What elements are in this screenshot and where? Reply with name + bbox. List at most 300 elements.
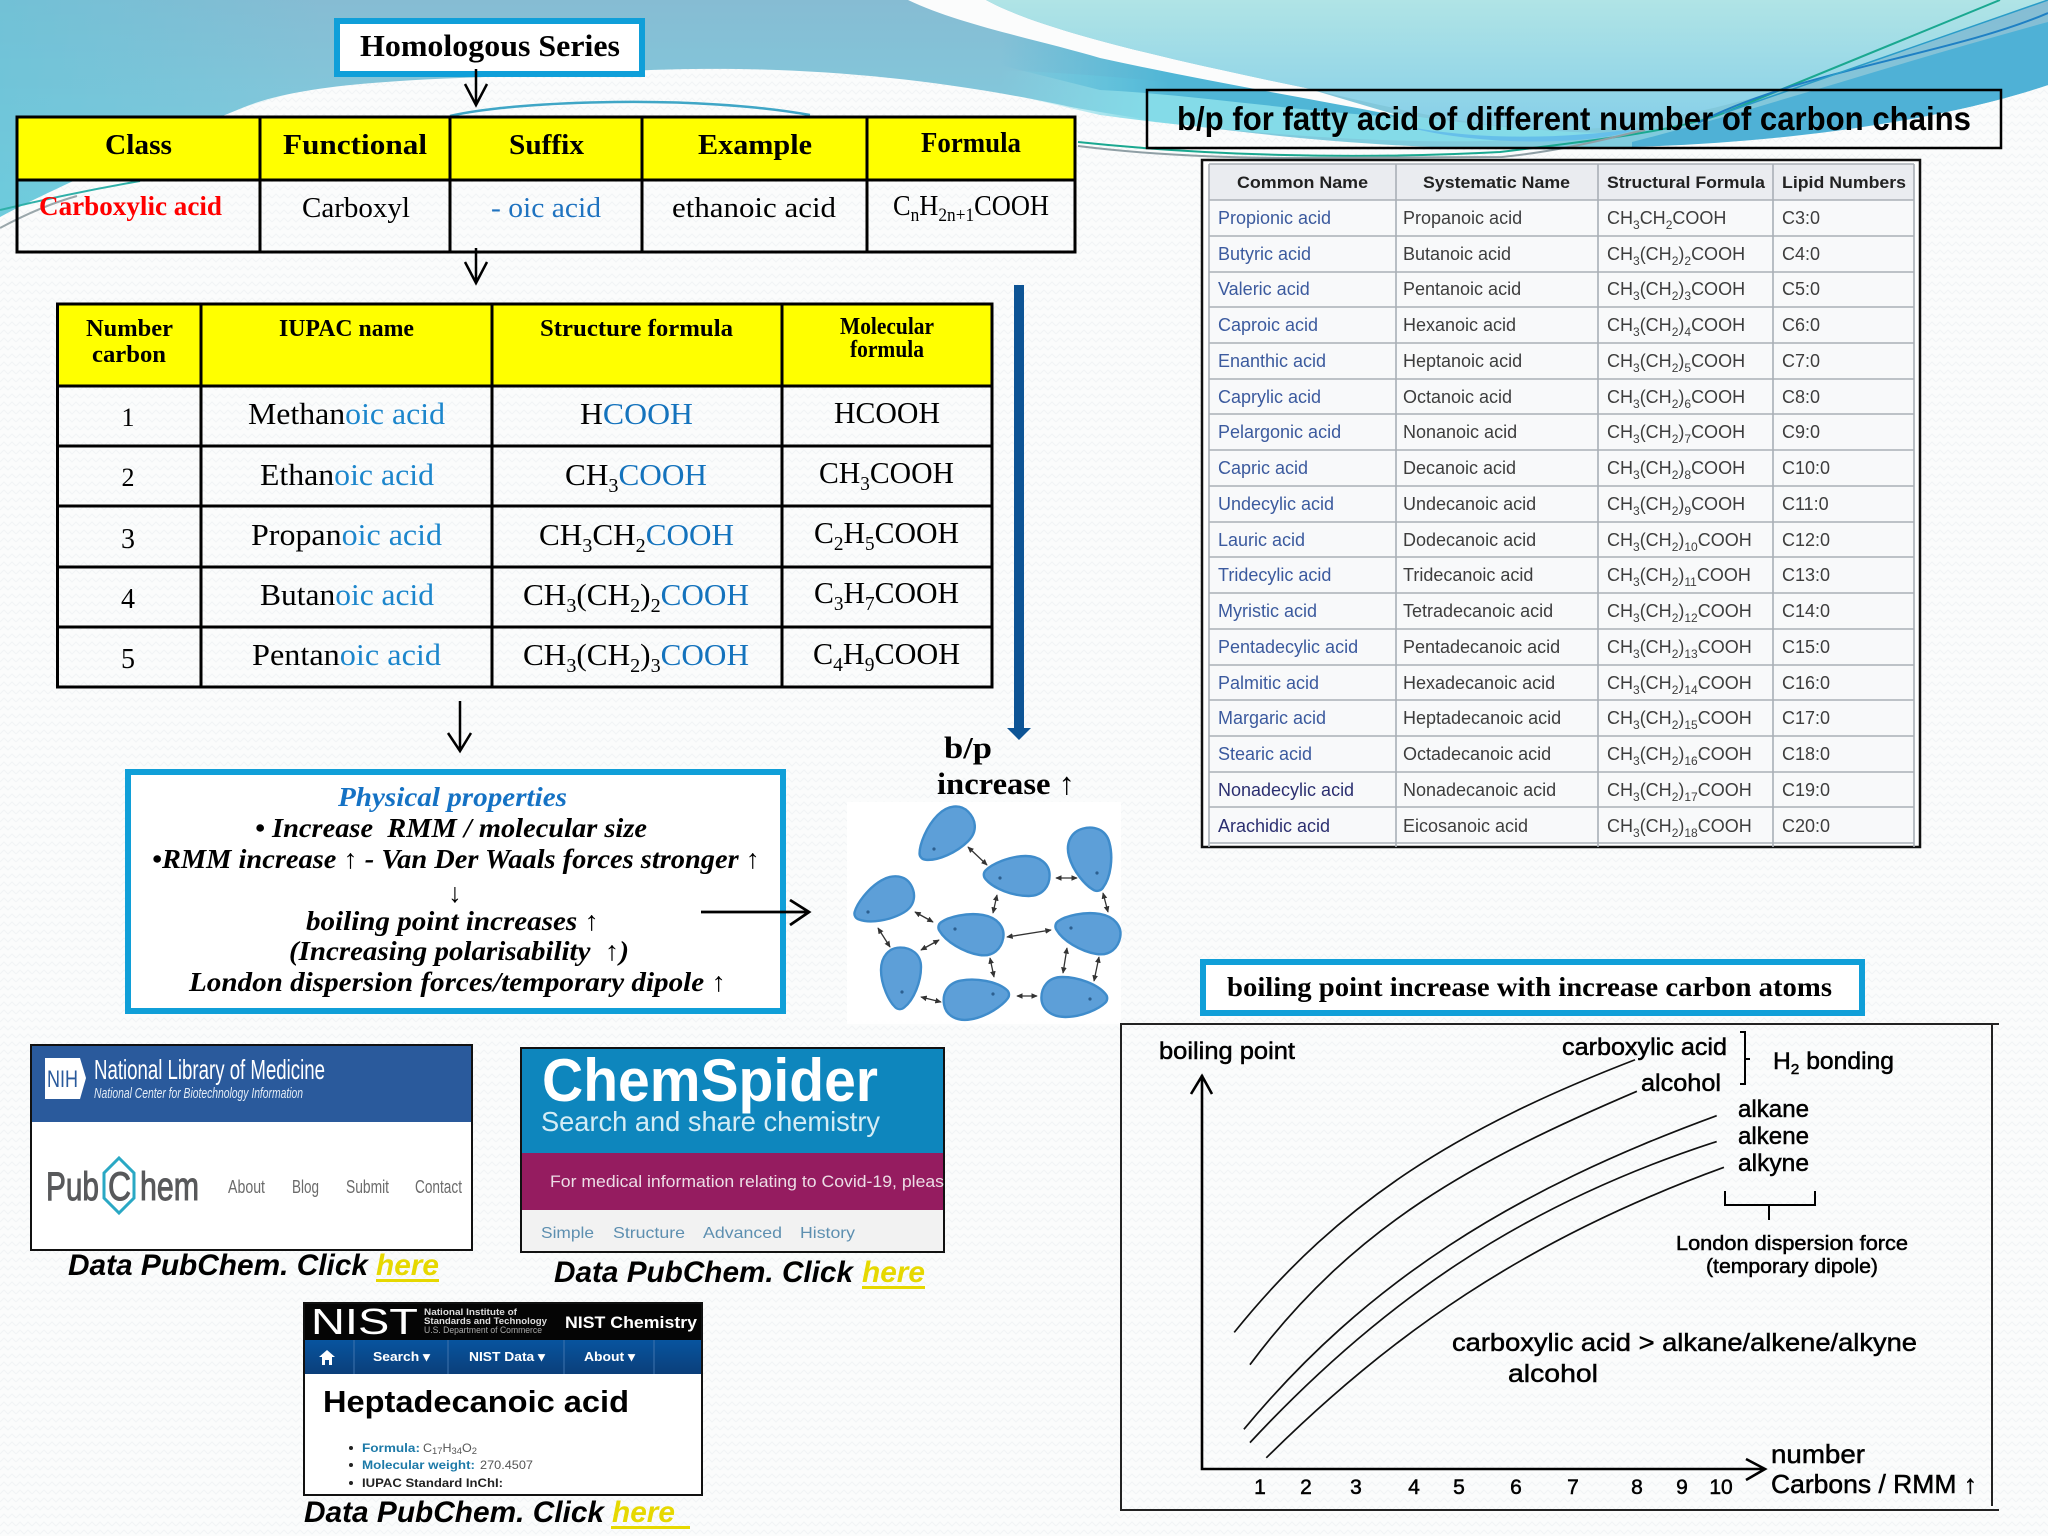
- table rows: fatty acids: ): [1678, 780, 1684, 800]
- screenshot: PubChem: hem: [140, 1165, 199, 1209]
- text block: properties list: boiling point increases ↑: [306, 906, 599, 936]
- table rows: fatty acids: 3: [1633, 540, 1640, 554]
- screenshot: PubChem: Blog: [292, 1177, 319, 1197]
- table row: pentanoic acid: 9: [865, 654, 874, 676]
- table rows: fatty acids: ): [1678, 458, 1684, 478]
- table rows: fatty acids: ): [1678, 708, 1684, 728]
- table row: butanoic acid: 7: [865, 593, 875, 615]
- text block: properties list: London dispersion forces/temporary dipole ↑: [188, 967, 726, 997]
- table rows: fatty acids: ): [1678, 673, 1684, 693]
- table rows: fatty acids: 2: [1672, 468, 1679, 482]
- screenshot: ChemSpider: For medical information relating to Covid-19, pleas: [550, 1172, 944, 1191]
- heading box: boiling point trend: [1203, 962, 1862, 1013]
- table row: methanoic acid: Methanoic acid: [248, 396, 446, 431]
- table rows: fatty acids: (CH: [1640, 315, 1672, 335]
- comparison text: alcohol: [1508, 1360, 1598, 1388]
- table rows: fatty acids: ): [1678, 315, 1684, 335]
- table rows: fatty acids: Tetradecanoic acid: [1403, 601, 1553, 621]
- table row: ethanoic acid: [122, 455, 954, 497]
- table rows: fatty acids: Nonanoic acid: [1403, 422, 1517, 442]
- table rows: fatty acids: CH: [1607, 816, 1633, 836]
- table rows: fatty acids: Propionic acid: [1218, 208, 1331, 228]
- table rows: fatty acids: C12:0: [1782, 530, 1830, 550]
- table rows: fatty acids: CH: [1607, 279, 1633, 299]
- table rows: fatty acids: (CH: [1640, 279, 1672, 299]
- screenshot: NIST: NIST Data ▾: [469, 1349, 545, 1364]
- table rows: fatty acids: (CH: [1640, 458, 1672, 478]
- table: homologous series members: [57, 304, 992, 687]
- screenshot: NIST: About ▾: [584, 1349, 635, 1364]
- table row: methanoic acid: HCOOH: [580, 396, 693, 431]
- screenshot: NIST: National Institute of: [424, 1307, 518, 1318]
- table rows: fatty acids: COOH: [1691, 244, 1745, 264]
- table rows: fatty acids: 6: [1684, 397, 1691, 411]
- table rows: fatty acids: Capric acid: [1218, 458, 1308, 478]
- table rows: fatty acids: COOH: [1698, 637, 1752, 657]
- table row: butanoic acid: C: [814, 575, 835, 610]
- table rows: fatty acids: CH: [1607, 530, 1633, 550]
- table rows: fatty acids: COOH: [1691, 351, 1745, 371]
- table rows: fatty acids: 3: [1633, 683, 1640, 697]
- table rows: fatty acids: COOH: [1691, 422, 1745, 442]
- table rows: fatty acids: Nonadecylic acid: [1218, 780, 1354, 800]
- table row: pentanoic acid: COOH: [874, 636, 960, 671]
- table row: carboxylic acid: [39, 190, 1049, 226]
- table rows: fatty acids: (CH: [1640, 780, 1672, 800]
- heading: physical properties: Physical properties: [337, 782, 567, 812]
- table row: carboxylic acid: Carboxylic acid: [39, 191, 222, 221]
- table rows: fatty acids: CH: [1607, 673, 1633, 693]
- table rows: fatty acids: 7: [1684, 432, 1691, 446]
- screenshot: ChemSpider: Structure: [613, 1225, 685, 1242]
- table rows: fatty acids: Nonadecanoic acid: [1403, 780, 1556, 800]
- table rows: fatty acids: 3: [1633, 611, 1640, 625]
- callout: hydrogen bonding: bonding: [1799, 1048, 1894, 1075]
- table header: class summary: Formula: [921, 127, 1021, 159]
- screenshot: PubChem: National Center for Biotechnology Information: [94, 1085, 303, 1102]
- comparison text: carboxylic acid > alkane/alkene/alkyne: [1452, 1329, 1917, 1357]
- x axis tick labels: 2: [1300, 1476, 1312, 1499]
- table row: ethanoic acid: 2: [122, 463, 134, 492]
- table row: carboxylic acid: 2n+1: [938, 205, 974, 226]
- table rows: fatty acids: C7:0: [1782, 351, 1820, 371]
- table rows: fatty acids: C15:0: [1782, 637, 1830, 657]
- table rows: fatty acids: 2: [1666, 218, 1673, 232]
- table rows: fatty acids: COOH: [1698, 780, 1752, 800]
- table row: propanoic acid: 3: [121, 524, 135, 555]
- table rows: fatty acids: C8:0: [1782, 387, 1820, 407]
- x axis label: Carbons / RMM ↑: [1771, 1469, 1977, 1499]
- x axis tick labels: 3: [1350, 1476, 1362, 1499]
- table rows: fatty acids: 3: [1633, 718, 1640, 732]
- table rows: fatty acids: CH: [1607, 601, 1633, 621]
- table rows: fatty acids: 2: [1672, 432, 1679, 446]
- table row: carboxylic acid: ethanoic acid: [672, 192, 837, 224]
- table rows: fatty acids: ): [1678, 422, 1684, 442]
- callout: London dispersion force: London dispersion force: [1676, 1233, 1908, 1255]
- table rows: fatty acids: C6:0: [1782, 315, 1820, 335]
- table rows: fatty acids: Arachidic acid: [1218, 816, 1330, 836]
- screenshot: NIST: 2: [472, 1446, 477, 1456]
- table rows: fatty acids: COOH: [1691, 494, 1745, 514]
- table rows: fatty acids: CH: [1607, 744, 1633, 764]
- table rows: fatty acids: COOH: [1698, 601, 1752, 621]
- table rows: fatty acids: COOH: [1698, 816, 1752, 836]
- table row: propanoic acid: C: [814, 515, 835, 550]
- table rows: fatty acids: 18: [1684, 826, 1698, 840]
- table rows: fatty acids: Caprylic acid: [1218, 387, 1321, 407]
- table row: propanoic acid: 5: [865, 533, 875, 555]
- x axis tick labels: 6: [1510, 1476, 1522, 1499]
- table row: carboxylic acid: H: [919, 190, 938, 222]
- arrow: series table to physical properties: [448, 701, 471, 751]
- x axis tick labels: [1254, 1476, 1733, 1499]
- table rows: fatty acids: (CH: [1640, 816, 1672, 836]
- table row: butanoic acid: CH: [523, 577, 566, 612]
- table rows: fatty acids: CH: [1607, 315, 1633, 335]
- table rows: fatty acids: Pentadecanoic acid: [1403, 637, 1560, 657]
- table row: methanoic acid: [122, 395, 940, 432]
- arrow: class table to series table: [465, 248, 487, 283]
- table rows: fatty acids: 2: [1672, 504, 1679, 518]
- heading box: boiling point trend: boiling point increase with increase carbon atoms: [1227, 972, 1832, 1002]
- table rows: fatty acids: COOH: [1698, 744, 1752, 764]
- table rows: fatty acids: C13:0: [1782, 565, 1830, 585]
- table rows: fatty acids: Enanthic acid: [1218, 351, 1326, 371]
- table rows: fatty acids: 3: [1633, 647, 1640, 661]
- table rows: fatty acids: C5:0: [1782, 279, 1820, 299]
- x axis tick labels: 7: [1567, 1476, 1579, 1499]
- table rows: fatty acids: ): [1678, 816, 1684, 836]
- table row: propanoic acid: CH: [592, 517, 636, 552]
- table rows: fatty acids: 2: [1672, 540, 1679, 554]
- table row: methanoic acid: HCOOH: [834, 395, 940, 430]
- table row: methanoic acid: 1: [122, 403, 134, 432]
- table header: series members: Number: [86, 316, 173, 342]
- table rows: fatty acids: ): [1678, 744, 1684, 764]
- table rows: fatty acids: 14: [1684, 683, 1698, 697]
- table row: carboxylic acid: - oic acid: [491, 192, 602, 224]
- screenshot: PubChem: Contact: [415, 1177, 462, 1197]
- table row: pentanoic acid: CH: [523, 637, 566, 672]
- screenshot: NIST: C: [423, 1441, 432, 1455]
- table rows: fatty acids: CH: [1607, 637, 1633, 657]
- callout: London dispersion force: (temporary dipole): [1706, 1256, 1878, 1278]
- table rows: fatty acids: (CH: [1640, 494, 1672, 514]
- screenshot: NIST: H: [443, 1441, 452, 1455]
- table rows: fatty acids: COOH: [1698, 708, 1752, 728]
- table rows: fatty acids: 3: [1633, 289, 1640, 303]
- table row: propanoic acid: Propanoic acid: [251, 517, 443, 552]
- table rows: fatty acids: COOH: [1697, 565, 1751, 585]
- table rows: fatty acids: ): [1678, 244, 1684, 264]
- table rows: fatty acids: CH: [1607, 351, 1633, 371]
- table row: pentanoic acid: COOH: [661, 637, 749, 672]
- panel: physical properties: [128, 772, 783, 1011]
- table rows: fatty acids: Palmitic acid: [1218, 673, 1319, 693]
- caption: NIST link: here: [612, 1496, 675, 1529]
- table rows: fatty acids: ): [1678, 601, 1684, 621]
- table rows: fatty acids: Tridecanoic acid: [1403, 565, 1533, 585]
- caption: PubChem link: here: [376, 1249, 439, 1282]
- screenshot: ChemSpider: Simple: [541, 1225, 594, 1242]
- screenshot: NIST: 270.4507: [480, 1458, 533, 1472]
- table header: class summary: [105, 127, 1021, 161]
- table rows: fatty acids: Hexanoic acid: [1403, 315, 1516, 335]
- table rows: fatty acids: (CH: [1640, 601, 1672, 621]
- table rows: fatty acids: CH: [1607, 708, 1633, 728]
- table rows: fatty acids: 16: [1684, 754, 1698, 768]
- table rows: fatty acids: 2: [1672, 361, 1679, 375]
- table row: butanoic acid: 3: [834, 593, 843, 615]
- table rows: fatty acids: CH: [1607, 565, 1633, 585]
- table rows: fatty acids: 3: [1633, 325, 1640, 339]
- table rows: fatty acids: CH: [1607, 244, 1633, 264]
- table rows: fatty acids: 2: [1672, 611, 1679, 625]
- table row: pentanoic acid: Pentanoic acid: [252, 637, 442, 672]
- text block: properties list: [152, 813, 760, 997]
- x axis tick labels: 8: [1631, 1476, 1643, 1499]
- table rows: fatty acids: 3: [1633, 754, 1640, 768]
- screenshot: PubChem: [31, 1045, 472, 1250]
- table rows: fatty acids: 2: [1672, 325, 1679, 339]
- table rows: fatty acids: 17: [1684, 790, 1698, 804]
- table rows: fatty acids: C17:0: [1782, 708, 1830, 728]
- table rows: fatty acids: (CH: [1640, 422, 1672, 442]
- caption: ChemSpider link: here: [862, 1256, 925, 1289]
- text block: properties list: •RMM increase ↑ - Van Der Waals forces stronger ↑: [152, 844, 760, 874]
- table rows: fatty acids: C14:0: [1782, 601, 1830, 621]
- screenshot: PubChem: Submit: [346, 1177, 389, 1197]
- table rows: fatty acids: COOH: [1691, 315, 1745, 335]
- table rows: fatty acids: Undecanoic acid: [1403, 494, 1536, 514]
- table header: fatty acids: Structural Formula: [1607, 173, 1766, 192]
- table rows: fatty acids: 8: [1684, 468, 1691, 482]
- table rows: fatty acids: Lauric acid: [1218, 530, 1305, 550]
- chart curves: [1234, 1060, 1724, 1458]
- table row: pentanoic acid: (CH: [576, 637, 630, 672]
- table rows: fatty acids: 9: [1684, 504, 1691, 518]
- table rows: fatty acids: 2: [1672, 647, 1679, 661]
- table rows: fatty acids: Pelargonic acid: [1218, 422, 1341, 442]
- table rows: fatty acids: Propanoic acid: [1403, 208, 1522, 228]
- table rows: fatty acids: Pentanoic acid: [1403, 279, 1521, 299]
- table rows: fatty acids: CH: [1607, 458, 1633, 478]
- table rows: fatty acids: COOH: [1672, 208, 1726, 228]
- arrow: blue trend down: [1007, 285, 1031, 740]
- screenshot: NIST: Heptadecanoic acid: [323, 1384, 629, 1419]
- table rows: fatty acids: 2: [1672, 754, 1679, 768]
- table row: pentanoic acid: 3: [651, 655, 661, 677]
- table rows: fatty acids: Octanoic acid: [1403, 387, 1512, 407]
- heading box: fatty acid boiling points: b/p for fatty acid of different number of carbon chains: [1177, 100, 1971, 137]
- table row: propanoic acid: 2: [834, 533, 843, 555]
- table rows: fatty acids: 3: [1633, 218, 1640, 232]
- line chart: boiling point vs carbon number: [1121, 1024, 1999, 1510]
- screenshot: NIST: Formula:: [362, 1441, 420, 1455]
- table rows: fatty acids: Tridecylic acid: [1218, 565, 1331, 585]
- table rows: fatty acids: C18:0: [1782, 744, 1830, 764]
- callout: hydrogen bonding: H: [1773, 1048, 1790, 1075]
- table rows: fatty acids: Octadecanoic acid: [1403, 744, 1551, 764]
- table row: propanoic acid: 2: [636, 535, 646, 557]
- table row: propanoic acid: H: [843, 515, 865, 550]
- table rows: fatty acids: Butyric acid: [1218, 244, 1311, 264]
- curve labels: alkene: [1738, 1123, 1809, 1150]
- heading box: Homologous Series: [337, 21, 642, 74]
- table row: pentanoic acid: 4: [833, 654, 843, 676]
- table row: butanoic acid: 4: [121, 584, 135, 615]
- table rows: fatty acids: ): [1678, 387, 1684, 407]
- table rows: fatty acids: 3: [1633, 790, 1640, 804]
- curve labels: alkane: [1738, 1096, 1809, 1123]
- table rows: fatty acids: Margaric acid: [1218, 708, 1326, 728]
- callout: hydrogen bonding: 2: [1791, 1061, 1799, 1078]
- table rows: fatty acids: 15: [1684, 718, 1698, 732]
- table rows: fatty acids: COOH: [1698, 530, 1752, 550]
- curve labels: carboxylic acid: [1562, 1034, 1727, 1061]
- table rows: fatty acids: 3: [1633, 254, 1640, 268]
- table rows: fatty acids: 3: [1633, 826, 1640, 840]
- table row: ethanoic acid: 3: [860, 473, 870, 495]
- table rows: fatty acids: C20:0: [1782, 816, 1830, 836]
- screenshot: PubChem: C: [108, 1165, 131, 1209]
- table row: ethanoic acid: Ethanoic acid: [260, 457, 435, 492]
- table row: ethanoic acid: COOH: [870, 455, 954, 490]
- table rows: fatty acids: (CH: [1640, 708, 1672, 728]
- table row: pentanoic acid: 3: [566, 655, 576, 677]
- comparison text: [1452, 1329, 1917, 1388]
- table rows: fatty acids: (CH: [1640, 565, 1672, 585]
- table row: propanoic acid: CH: [539, 517, 582, 552]
- table header: series members: carbon: [92, 342, 166, 368]
- table rows: fatty acids: C9:0: [1782, 422, 1820, 442]
- table row: carboxylic acid: n: [911, 205, 920, 226]
- table rows: fatty acids: Eicosanoic acid: [1403, 816, 1528, 836]
- table rows: fatty acids: Undecylic acid: [1218, 494, 1334, 514]
- table rows: fatty acids: (CH: [1640, 244, 1672, 264]
- x axis label: number: [1771, 1439, 1865, 1469]
- table rows: fatty acids: 11: [1684, 575, 1697, 589]
- screenshot: NIST: Standards and Technology: [424, 1316, 548, 1327]
- table row: pentanoic acid: H: [843, 636, 865, 671]
- table rows: fatty acids: ): [1678, 494, 1684, 514]
- table rows: fatty acids: C16:0: [1782, 673, 1830, 693]
- chart axes: [1191, 1075, 1765, 1480]
- table row: carboxylic acid: C: [893, 190, 912, 222]
- table: fatty acids: [1202, 160, 1920, 847]
- table rows: fatty acids: COOH: [1698, 673, 1752, 693]
- heading box: Homologous Series: Homologous Series: [360, 28, 620, 63]
- table rows: fatty acids: 3: [1633, 575, 1640, 589]
- table rows: fatty acids: COOH: [1691, 279, 1745, 299]
- table rows: fatty acids: C10:0: [1782, 458, 1830, 478]
- screenshot: PubChem: About: [228, 1177, 265, 1197]
- arrow: heading to class table: [465, 69, 487, 105]
- screenshot: PubChem: NIH: [47, 1066, 78, 1093]
- table rows: fatty acids: CH: [1607, 494, 1633, 514]
- table header: fatty acids: Systematic Name: [1423, 173, 1570, 192]
- screenshot: ChemSpider: Search and share chemistry: [541, 1106, 880, 1137]
- diagram: molecules with dispersion forces: [846, 798, 1124, 1024]
- table header: class summary: Example: [698, 129, 812, 161]
- curve labels: [1562, 1034, 1809, 1177]
- table row: butanoic acid: 2: [630, 595, 640, 617]
- table rows: fatty acids: 5: [1684, 361, 1691, 375]
- table row: butanoic acid: ): [640, 577, 651, 612]
- table row: propanoic acid: 3: [582, 535, 592, 557]
- text block: properties list: (Increasing polarisability ↑): [289, 936, 629, 966]
- table rows: fatty acids: 10: [1684, 540, 1698, 554]
- table rows: fatty acids: C3:0: [1782, 208, 1820, 228]
- table rows: fatty acids: (CH: [1640, 530, 1672, 550]
- heading box: fatty acid boiling points: [1147, 90, 2001, 148]
- table header: fatty acids: [1237, 173, 1906, 192]
- arrow: properties to molecule diagram: [701, 900, 809, 925]
- table rows: fatty acids: C11:0: [1782, 494, 1829, 514]
- table rows: fatty acids: 2: [1672, 254, 1679, 268]
- screenshot: PubChem: National Library of Medicine: [94, 1054, 325, 1085]
- x axis tick labels: 1: [1254, 1476, 1266, 1499]
- table rows: fatty acids: 2: [1684, 254, 1691, 268]
- screenshot: NIST: 34: [452, 1446, 462, 1456]
- table row: ethanoic acid: 3: [608, 475, 618, 497]
- screenshot: ChemSpider: [521, 1047, 944, 1252]
- table header: series members: Molecular: [840, 314, 934, 340]
- screenshot: NIST: [304, 1301, 702, 1495]
- table row: butanoic acid: Butanoic acid: [260, 577, 434, 612]
- table row: ethanoic acid: CH: [819, 455, 862, 490]
- screenshot: NIST: NIST: [311, 1301, 418, 1342]
- table rows: fatty acids: 2: [1672, 790, 1679, 804]
- table row: ethanoic acid: COOH: [618, 457, 707, 492]
- table header: fatty acids: Common Name: [1237, 173, 1368, 192]
- table row: pentanoic acid: 2: [630, 655, 640, 677]
- table rows: fatty acids: Caproic acid: [1218, 315, 1318, 335]
- x axis tick labels: 9: [1676, 1476, 1688, 1499]
- table rows: fatty acids: Pentadecylic acid: [1218, 637, 1358, 657]
- table rows: fatty acids: CH: [1607, 780, 1633, 800]
- screenshot: NIST: Search ▾: [373, 1349, 431, 1364]
- table rows: fatty acids: (CH: [1640, 351, 1672, 371]
- curve labels: alcohol: [1641, 1070, 1721, 1097]
- label: b/p increase: increase ↑: [937, 766, 1075, 801]
- table rows: fatty acids: Dodecanoic acid: [1403, 530, 1536, 550]
- table header: series members: formula: [850, 337, 924, 363]
- table rows: fatty acids: 2: [1672, 397, 1679, 411]
- caption: NIST link: Data PubChem. Click: [304, 1496, 605, 1529]
- table rows: fatty acids: 3: [1684, 289, 1691, 303]
- table rows: fatty acids: [1218, 208, 1830, 840]
- table rows: fatty acids: (CH: [1640, 744, 1672, 764]
- x axis tick labels: 4: [1408, 1476, 1420, 1499]
- table row: butanoic acid: 3: [566, 595, 576, 617]
- table rows: fatty acids: 3: [1633, 468, 1640, 482]
- screenshot: ChemSpider: History: [800, 1225, 855, 1242]
- table row: pentanoic acid: [121, 636, 960, 677]
- table row: carboxylic acid: COOH: [974, 190, 1049, 222]
- table rows: fatty acids: ): [1678, 637, 1684, 657]
- table rows: fatty acids: 2: [1672, 718, 1679, 732]
- table header: fatty acids: Lipid Numbers: [1782, 173, 1906, 192]
- label: b/p increase: b/p: [944, 730, 992, 765]
- table row: pentanoic acid: ): [640, 637, 651, 672]
- table header: series members: [86, 314, 934, 368]
- table rows: fatty acids: 2: [1672, 289, 1679, 303]
- table rows: fatty acids: C4:0: [1782, 244, 1820, 264]
- screenshot: ChemSpider: Advanced: [703, 1225, 782, 1242]
- table row: propanoic acid: COOH: [646, 517, 734, 552]
